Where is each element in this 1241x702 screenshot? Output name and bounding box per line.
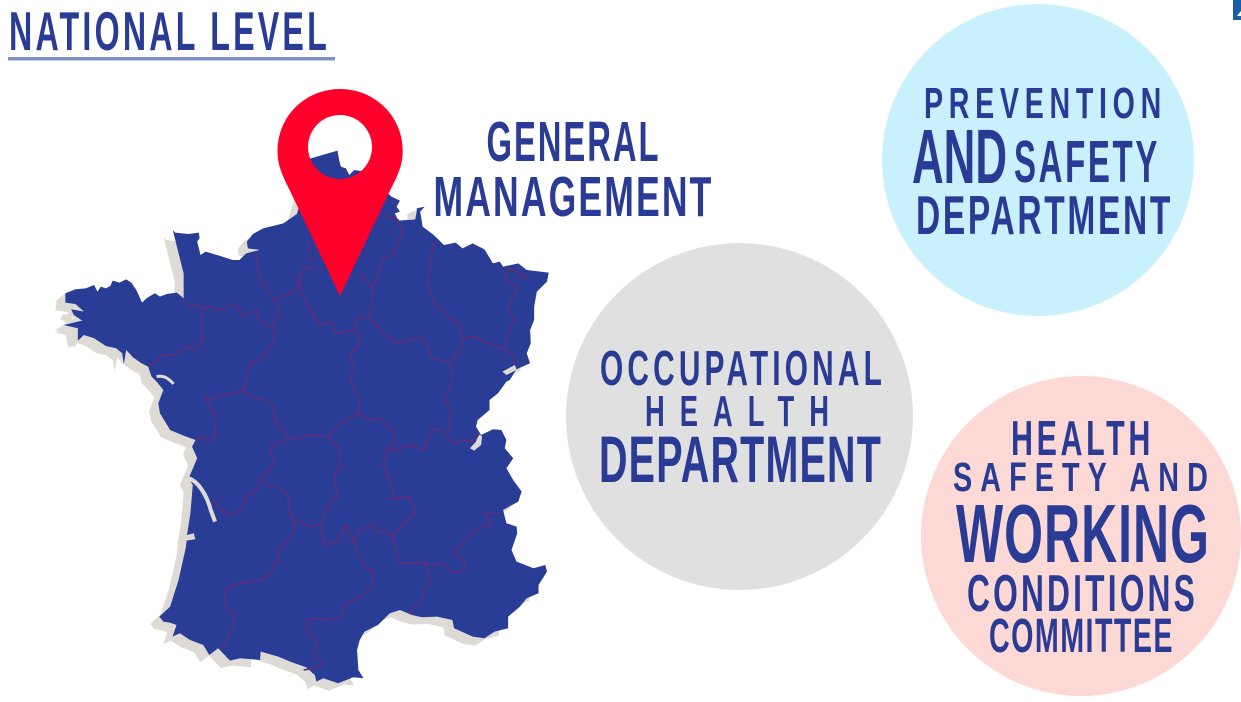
panel: health safety and working conditions committee: HEALTH bbox=[1011, 411, 1154, 466]
panel: occupational health department: DEPARTMENT bbox=[599, 423, 882, 496]
title: National Level bbox=[8, 0, 335, 62]
icon: red location pin bbox=[278, 89, 403, 296]
panel: occupational health department bbox=[566, 243, 913, 590]
panel: prevention and safety department: AND bbox=[912, 114, 1007, 200]
map of France with regions bbox=[55, 151, 549, 691]
panel: occupational health department: OCCUPATIONAL bbox=[600, 341, 886, 396]
panel: health safety and working conditions committee bbox=[921, 376, 1241, 696]
label: General Management bbox=[434, 110, 714, 228]
panel: prevention and safety department bbox=[882, 4, 1194, 316]
icon: corner fragment bbox=[1233, 0, 1241, 20]
label: General Management: GENERAL bbox=[486, 110, 660, 173]
label: General Management: MANAGEMENT bbox=[434, 165, 714, 228]
title: National Level: NATIONAL LEVEL bbox=[9, 0, 330, 62]
panel: occupational health department: HEALTH bbox=[645, 388, 844, 436]
